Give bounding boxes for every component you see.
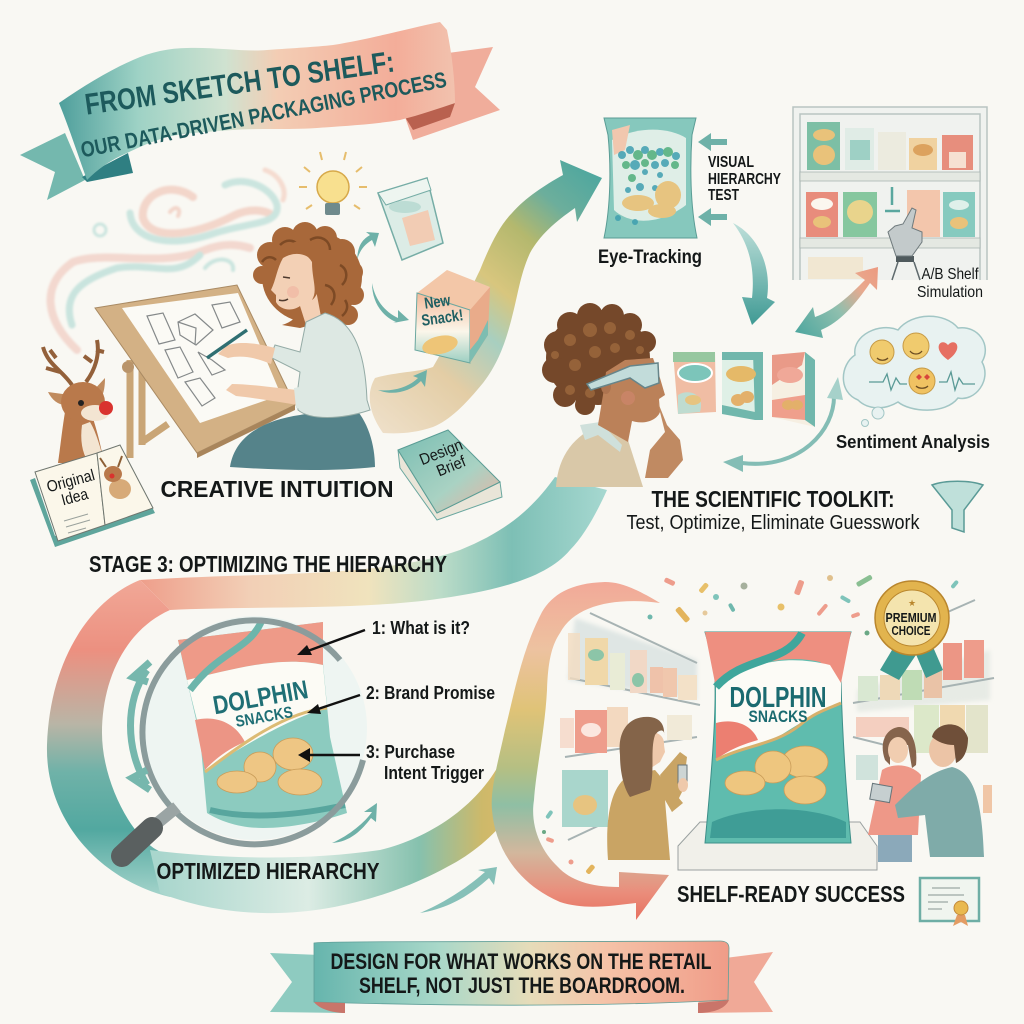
ear <box>601 378 611 394</box>
right tail <box>698 952 773 1013</box>
arrows between boxes <box>357 232 427 393</box>
lower arm and hand <box>226 384 298 405</box>
callouts: Intent Trigger <box>384 763 484 783</box>
arrow: down to toolkit <box>733 223 775 325</box>
pen <box>207 330 247 358</box>
pack one <box>673 352 716 414</box>
book: design brief: Brief <box>434 453 469 480</box>
banner right tail <box>405 47 500 140</box>
title banner <box>20 22 500 200</box>
right shelves <box>853 600 994 813</box>
ribbon: s-curve to shelf arrow <box>492 582 669 920</box>
visual hierarchy label <box>708 154 781 204</box>
eye-tracking panel <box>598 118 781 268</box>
ribbon: bottom sweep <box>150 740 540 913</box>
dolphin bag <box>178 620 347 828</box>
lens <box>143 616 367 840</box>
creative scene <box>30 152 502 547</box>
banner text <box>330 949 712 998</box>
book: original idea <box>30 445 155 547</box>
eye-tracking label: Eye-Tracking <box>598 247 702 268</box>
left shelf wash <box>568 618 697 700</box>
title text: FROM SKETCH TO SHELF: <box>83 46 396 122</box>
shelf label: Simulation <box>917 284 983 301</box>
shelf dolphin bag: SNACKS <box>748 707 808 726</box>
icon: certificate <box>920 878 979 926</box>
book: original idea: Original <box>45 467 97 496</box>
title text: OUR DATA-DRIVEN PACKAGING PROCESS <box>79 67 449 162</box>
confetti <box>542 574 959 875</box>
eye-tracking bag <box>604 118 697 238</box>
dolphin bag: SNACKS <box>234 704 295 731</box>
left shelves <box>560 613 700 840</box>
banner left tail <box>20 133 85 200</box>
package sketches <box>147 302 240 406</box>
store scene <box>542 574 994 875</box>
pack three <box>772 352 815 427</box>
icon: new snack box <box>415 270 490 363</box>
toolkit heading <box>626 486 920 534</box>
watercolor swirls <box>51 170 284 350</box>
man colleague <box>895 724 984 857</box>
top row packs <box>807 122 973 170</box>
ribbon: stage three band <box>140 477 607 610</box>
toolkit heading: Test, Optimize, Eliminate Guesswork <box>626 512 920 534</box>
callouts <box>297 618 495 783</box>
heading: creative intuition: CREATIVE INTUITION <box>160 476 394 502</box>
raised forearm and hand <box>218 343 275 364</box>
heat dots <box>615 146 680 225</box>
book: design brief <box>398 430 502 520</box>
heading: stage 3: STAGE 3: OPTIMIZING THE HIERARCHY <box>89 551 447 577</box>
banner text: SHELF, NOT JUST THE BOARDROOM. <box>359 973 685 998</box>
visual hierarchy label: HIERARCHY <box>708 171 781 188</box>
banner right fold <box>405 103 455 130</box>
banner body <box>59 22 455 180</box>
emoji faces <box>870 333 935 394</box>
ribbon: creative to testing <box>370 160 602 433</box>
scientist <box>542 303 683 487</box>
display plinth <box>678 822 877 870</box>
chips <box>217 738 322 795</box>
curved feedback arrow <box>723 377 843 472</box>
banner text: DESIGN FOR WHAT WORKS ON THE RETAIL <box>330 949 712 974</box>
icon: outline box <box>378 178 443 260</box>
toolkit heading: THE SCIENTIFIC TOOLKIT: <box>652 486 894 512</box>
visual hierarchy label: VISUAL <box>708 154 754 171</box>
arrow to ribbon <box>420 867 497 913</box>
lower pointer arrow <box>698 208 727 226</box>
bag brand: DOLPHIN <box>211 674 310 720</box>
sentiment label: Sentiment Analysis <box>836 431 990 452</box>
shelf simulation panel <box>793 107 987 301</box>
shelf label <box>917 266 983 301</box>
glasses <box>587 363 659 390</box>
lower row <box>562 770 608 827</box>
reindeer <box>43 340 113 463</box>
heading: optimized hierarchy: OPTIMIZED HIERARCHY <box>156 858 380 884</box>
upper pointer arrow <box>698 133 727 151</box>
robot hand <box>888 208 922 280</box>
premium badge: PREMIUM <box>886 610 936 625</box>
sentiment cloud <box>843 316 985 426</box>
callouts: 3: Purchase <box>366 742 455 762</box>
woman colleague <box>868 727 921 862</box>
hand <box>645 400 683 478</box>
shirt <box>270 313 370 418</box>
icon: light bulb <box>299 152 367 215</box>
icon: new snack box: New <box>423 292 452 313</box>
left tail <box>270 953 345 1013</box>
book: design brief: Design <box>417 437 465 469</box>
icon: funnel <box>932 481 983 532</box>
heart <box>939 342 957 360</box>
board legs <box>130 360 168 458</box>
double arrow shelf to toolkit <box>795 267 878 338</box>
face <box>598 358 665 442</box>
woman shopper <box>607 717 688 860</box>
callouts: 2: Brand Promise <box>366 683 495 703</box>
ribbon: left loop <box>47 580 190 897</box>
shelf label: A/B Shelf <box>922 266 979 283</box>
drafting board <box>95 285 295 458</box>
woman designer <box>207 222 375 470</box>
folds <box>314 1000 729 1013</box>
shirt <box>556 425 643 487</box>
pointer mark <box>885 187 900 211</box>
handle <box>155 807 177 825</box>
middle row <box>560 707 692 753</box>
mini reindeer sketch <box>100 456 131 499</box>
brand text: DOLPHIN <box>730 682 826 714</box>
icon: new snack box: Snack! <box>420 307 464 330</box>
eye-tracking chips <box>622 181 681 218</box>
premium badge <box>875 581 949 680</box>
badge ribbons <box>880 640 943 680</box>
pack two <box>722 352 763 420</box>
hair base <box>542 303 656 415</box>
shelf dolphin bag <box>705 632 851 843</box>
small up arrow <box>332 803 377 843</box>
callouts: 1: What is it? <box>372 618 470 638</box>
lens rim <box>142 620 363 844</box>
top row <box>568 633 697 700</box>
premium badge: CHOICE <box>892 623 931 638</box>
bottom banner <box>270 941 773 1013</box>
shelf <box>793 107 987 280</box>
skirt <box>230 405 375 470</box>
premium badge: ★ <box>908 598 916 608</box>
face <box>271 254 322 325</box>
three test packs <box>673 352 815 427</box>
book: original idea: Idea <box>60 486 90 509</box>
heading: shelf-ready success: SHELF-READY SUCCESS <box>677 881 905 907</box>
couple <box>868 724 984 862</box>
second row packs <box>806 190 975 237</box>
magnifier and hero bag <box>122 616 377 856</box>
banner left fold <box>82 153 133 182</box>
chips <box>725 746 828 804</box>
side double arrow <box>130 662 150 790</box>
pulse lines <box>869 372 975 390</box>
banner body <box>314 941 729 1005</box>
visual hierarchy label: TEST <box>708 187 739 204</box>
hair <box>253 222 364 328</box>
